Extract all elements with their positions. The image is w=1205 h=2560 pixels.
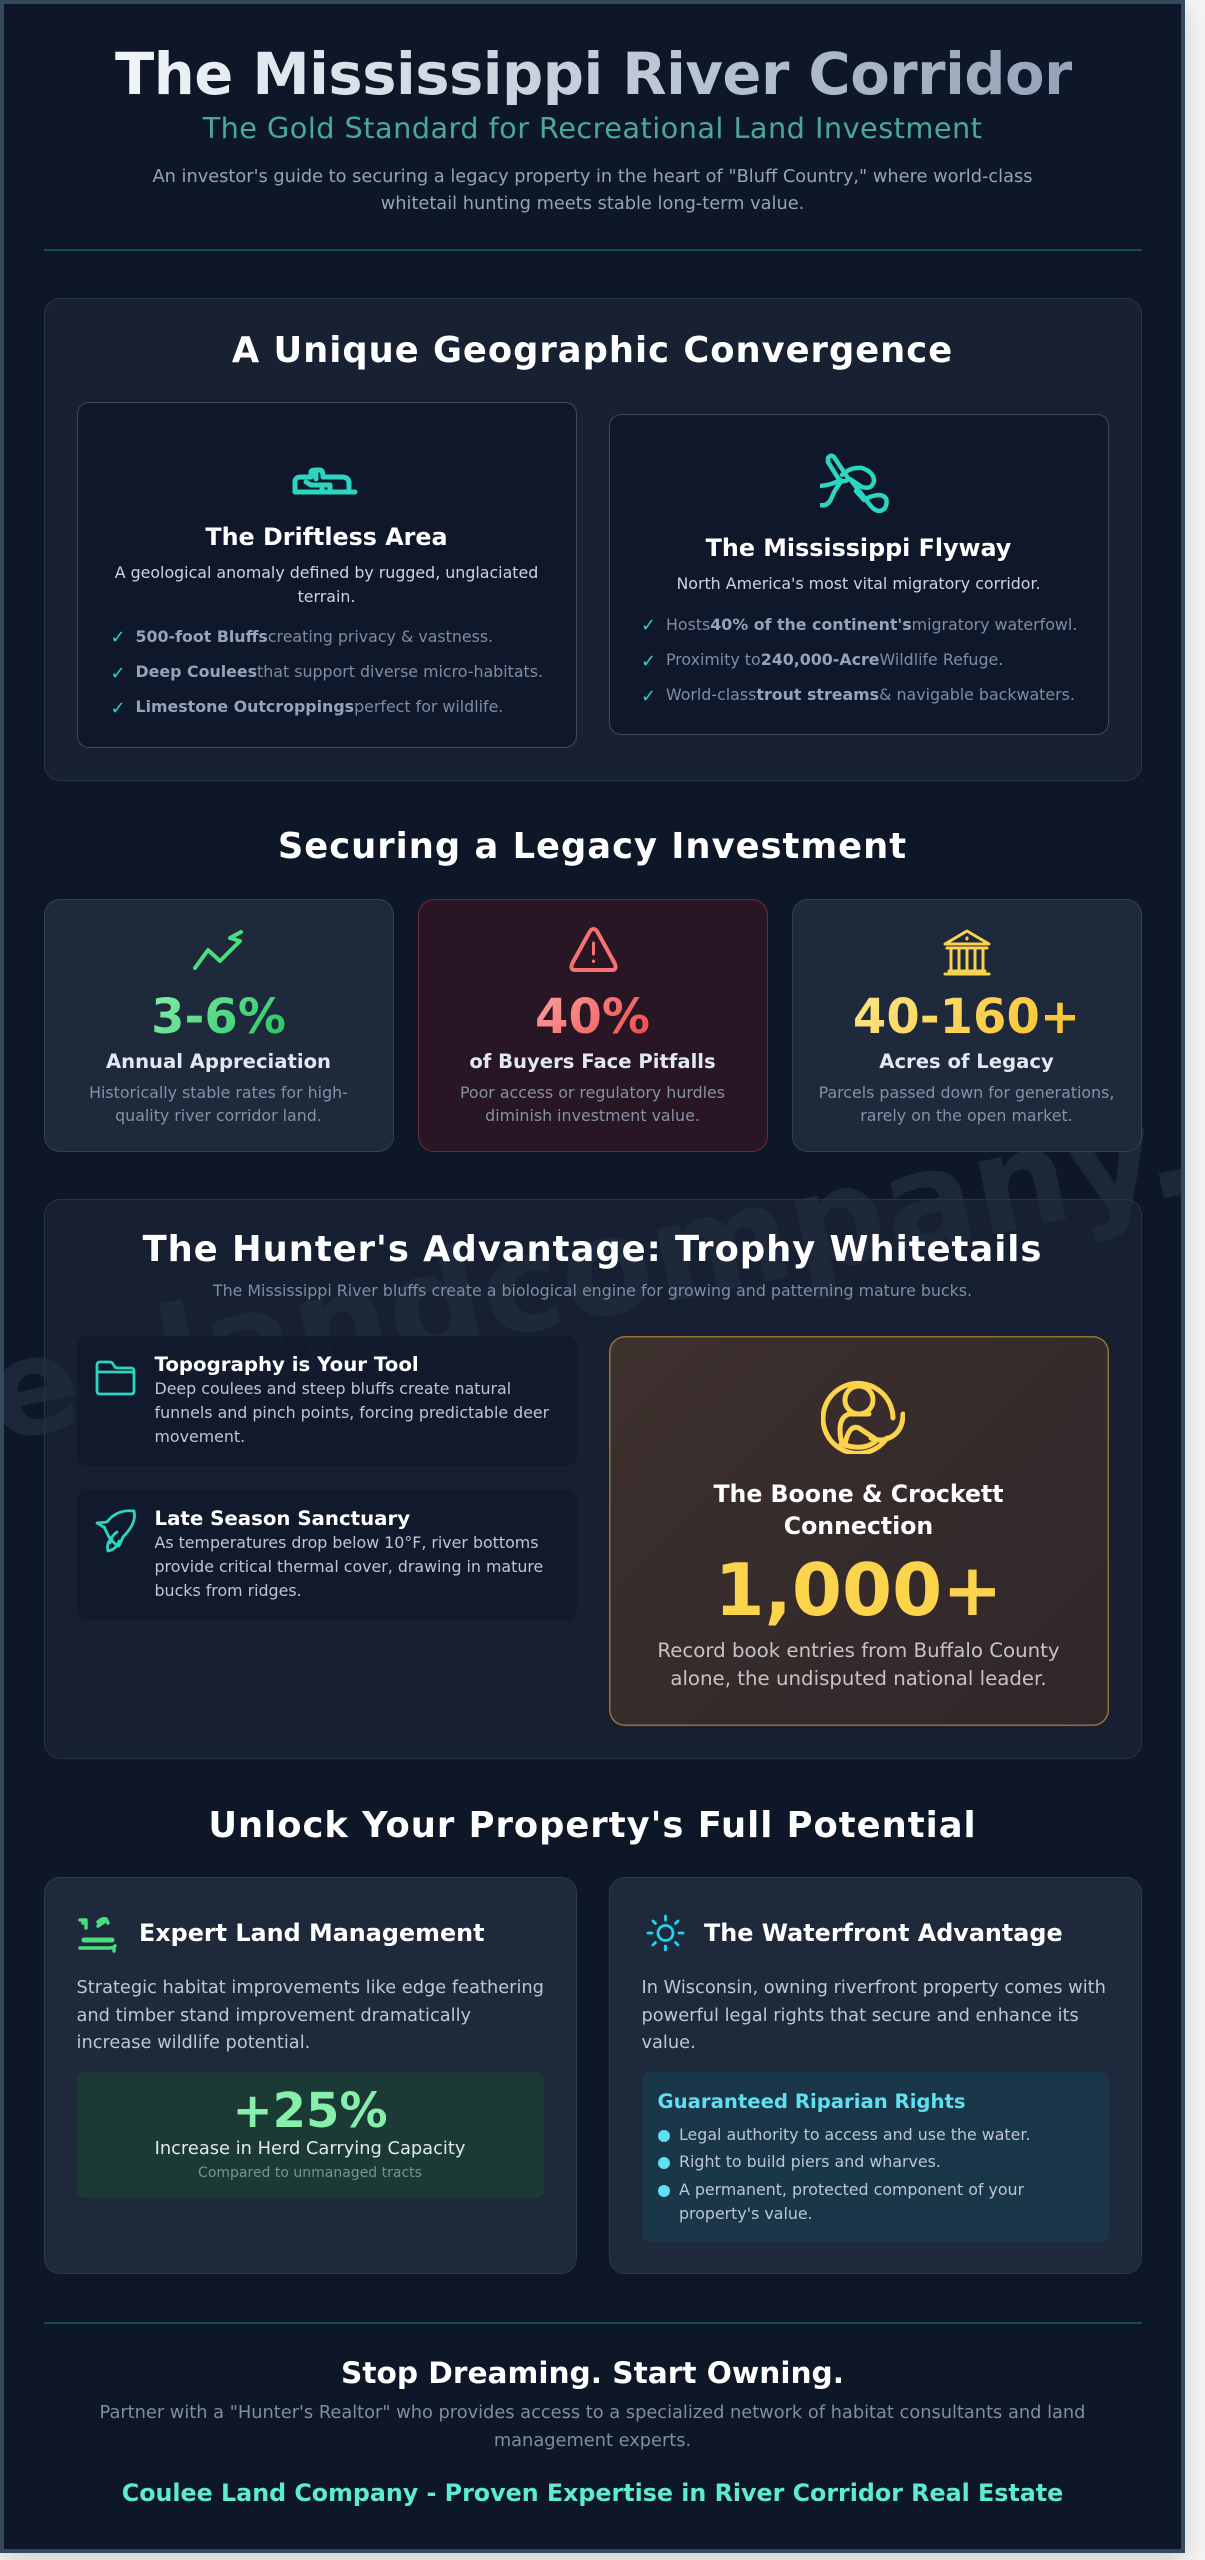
check list xyxy=(641,615,1077,707)
icon: bluffs xyxy=(292,468,358,494)
card: mississippi flyway xyxy=(608,414,1108,735)
stat card: buyer pitfalls xyxy=(418,899,768,1152)
bullet xyxy=(658,2180,1024,2223)
heading: hunter's advantage: The Hunter's Advantage: Trophy Whitetails xyxy=(143,1229,1042,1270)
list item: Proximity to240,000-AcreWildlife Refuge. xyxy=(666,650,1003,669)
callout title: Guaranteed Riparian Rights xyxy=(658,2090,966,2113)
header xyxy=(44,41,1142,251)
stat card: annual appreciation xyxy=(44,899,394,1152)
card description: A geological anomaly defined by rugged, unglaciated xyxy=(115,563,538,582)
stat description xyxy=(819,1082,1114,1125)
stat description: Parcels passed down for generations, xyxy=(819,1082,1114,1102)
callout label: Increase in Herd Carrying Capacity xyxy=(155,2138,465,2158)
list item: ✓ xyxy=(110,663,126,684)
header divider xyxy=(44,249,1142,251)
bullet: Legal authority to access and use the water. xyxy=(679,2125,1030,2144)
subtitle: The Gold Standard for Recreational Land Investment xyxy=(203,111,982,145)
call to action text xyxy=(0,2399,1185,2455)
stat description: Historically stable rates for high- xyxy=(89,1082,348,1102)
card text xyxy=(154,1533,543,1600)
stat value: 3-6% xyxy=(151,989,286,1045)
card text: Deep coulees and steep bluffs create natural xyxy=(154,1379,511,1398)
icon: land management xyxy=(78,1917,117,1953)
card description xyxy=(114,563,538,606)
icon: hunter badge xyxy=(821,1380,905,1454)
card title: Late Season Sanctuary xyxy=(154,1507,410,1530)
card text: powerful legal rights that secure and enhance its xyxy=(642,2005,1079,2026)
list item: ✓ xyxy=(641,651,656,672)
icon: rocket xyxy=(96,1509,136,1552)
card text xyxy=(642,1977,1106,2053)
callout title: Connection xyxy=(784,1512,933,1540)
stat value: 40-160+ xyxy=(853,989,1080,1045)
callout note: Compared to unmanaged tracts xyxy=(198,2165,422,2181)
icon: bank xyxy=(944,930,991,976)
bullet list xyxy=(658,2125,1030,2223)
icon: warning triangle xyxy=(569,927,618,972)
callout value: 1,000+ xyxy=(714,1548,1003,1632)
list item: Hosts40% of the continent'smigratory waterfowl. xyxy=(666,615,1077,634)
card: topography xyxy=(76,1336,576,1466)
stat card: acres of legacy xyxy=(792,899,1142,1152)
callout title: The Boone & Crockett xyxy=(713,1480,1004,1508)
stat description: rarely on the open market. xyxy=(860,1106,1073,1125)
card title: The Waterfront Advantage xyxy=(704,1919,1063,1947)
card text: funnels and pinch points, forcing predictable deer xyxy=(154,1403,549,1422)
card text: In Wisconsin, owning riverfront property comes with xyxy=(642,1977,1106,1998)
stat description: diminish investment value. xyxy=(485,1106,700,1125)
panel: hunter's advantage xyxy=(44,1199,1142,1759)
card title: The Driftless Area xyxy=(205,523,448,551)
icon: folder xyxy=(96,1360,136,1396)
callout text: Record book entries from Buffalo County xyxy=(657,1639,1060,1662)
card title: Topography is Your Tool xyxy=(154,1353,419,1376)
callout text xyxy=(657,1639,1060,1690)
list item: ✓ xyxy=(110,698,126,719)
callout text: alone, the undisputed national leader. xyxy=(670,1667,1047,1690)
card text xyxy=(76,1977,544,2053)
company line: Coulee Land Company - Proven Expertise in River Corridor Real Estate xyxy=(122,2479,1063,2507)
list item: Limestone Outcroppingsperfect for wildlife. xyxy=(136,697,503,716)
footer xyxy=(44,2322,1142,2507)
stat label: Annual Appreciation xyxy=(106,1050,331,1073)
card title: The Mississippi Flyway xyxy=(706,534,1011,562)
list item: ✓ xyxy=(641,686,656,707)
card: expert land management xyxy=(44,1877,576,2274)
heading: full potential: Unlock Your Property's Full Potential xyxy=(208,1805,977,1846)
bullet: property's value. xyxy=(679,2204,813,2223)
callout value: +25% xyxy=(232,2083,388,2139)
intro text: whitetail hunting meets stable long-term value. xyxy=(381,193,804,214)
heading: legacy investment: Securing a Legacy Investment xyxy=(278,826,907,867)
card description: North America's most vital migratory corridor. xyxy=(676,574,1041,593)
card text: bucks from ridges. xyxy=(154,1581,302,1600)
footer divider xyxy=(44,2322,1142,2324)
card: boone & crockett xyxy=(608,1336,1108,1726)
panel: geographic convergence xyxy=(44,298,1142,781)
bullet: A permanent, protected component of your xyxy=(679,2180,1024,2199)
bullet: Right to build piers and wharves. xyxy=(679,2152,941,2171)
list item: ✓ xyxy=(641,615,656,636)
icon: sun xyxy=(646,1914,684,1952)
card text: movement. xyxy=(154,1427,245,1446)
stat value: 40% xyxy=(535,989,650,1045)
card text: Strategic habitat improvements like edge feathering xyxy=(76,1977,544,1998)
stat description: quality river corridor land. xyxy=(115,1106,322,1125)
list item: 500-foot Bluffscreating privacy & vastness. xyxy=(136,627,493,646)
title: The Mississippi River Corridor xyxy=(115,41,1072,108)
icon: flyway xyxy=(820,454,889,514)
card text: As temperatures drop below 10°F, river bottoms xyxy=(154,1533,538,1552)
stat description xyxy=(89,1082,348,1125)
intro text: An investor's guide to securing a legacy property in the heart of "Bluff Country," where world-class xyxy=(152,166,1033,186)
callout: carrying capacity xyxy=(76,2072,544,2198)
call to action heading: Stop Dreaming. Start Owning. xyxy=(341,2356,844,2390)
card text xyxy=(154,1379,550,1446)
callout: riparian rights xyxy=(642,2072,1108,2242)
section subtitle: The Mississippi River bluffs create a biological engine for growing and patterning mature bucks. xyxy=(213,1281,972,1300)
icon: trend up xyxy=(193,930,244,970)
card title: Expert Land Management xyxy=(139,1919,485,1947)
intro text xyxy=(152,166,1033,214)
stat label: Acres of Legacy xyxy=(879,1050,1054,1073)
card description: terrain. xyxy=(298,587,355,606)
check list xyxy=(110,627,543,719)
stat description: Poor access or regulatory hurdles xyxy=(460,1082,725,1102)
list item: Deep Couleesthat support diverse micro-habitats. xyxy=(136,662,543,681)
call to action text: Partner with a "Hunter's Realtor" who provides access to a specialized network of habitat consultants and land xyxy=(100,2402,1085,2423)
card: waterfront advantage xyxy=(608,1877,1142,2274)
call to action text: management experts. xyxy=(494,2430,691,2451)
card text: value. xyxy=(642,2032,696,2053)
stat label: of Buyers Face Pitfalls xyxy=(469,1050,716,1073)
card text: increase wildlife potential. xyxy=(76,2032,310,2053)
stat description xyxy=(460,1082,725,1125)
card: late season xyxy=(76,1490,576,1620)
card: driftless area xyxy=(76,402,576,748)
list item: ✓ xyxy=(110,627,126,648)
card text: provide critical thermal cover, drawing in mature xyxy=(154,1557,543,1576)
callout title xyxy=(713,1480,1004,1540)
list item: World-classtrout streams& navigable backwaters. xyxy=(666,685,1075,704)
card text: and timber stand improvement dramatically xyxy=(76,2005,471,2026)
heading: geographic convergence: A Unique Geographic Convergence xyxy=(232,330,953,371)
